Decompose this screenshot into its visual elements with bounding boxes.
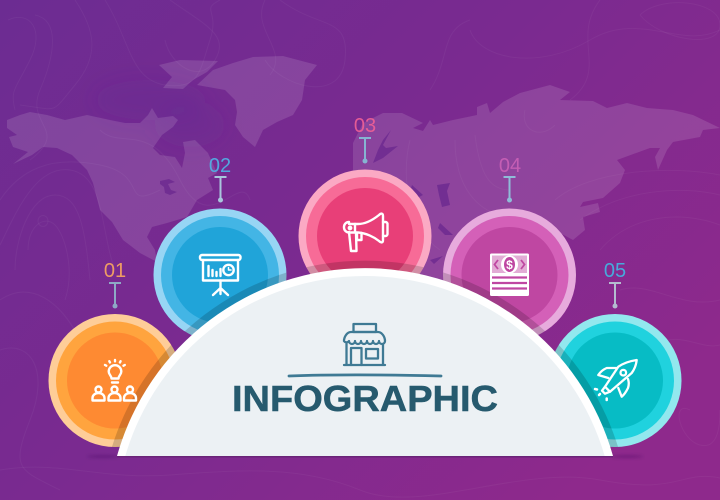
number 04: 04 [499, 155, 521, 177]
world map [7, 56, 720, 300]
icon: megaphone [344, 214, 388, 251]
dome shadow on circles [109, 261, 621, 456]
item 05 [548, 260, 682, 447]
icon: banknotes: $ [506, 258, 513, 272]
pin 01 [109, 283, 121, 308]
ground shadows [87, 455, 643, 458]
pin 02 [214, 177, 226, 202]
dome bottom edge [117, 456, 613, 458]
dome inner fill [125, 276, 605, 456]
item 01 [48, 260, 182, 447]
circle 01 [48, 314, 182, 447]
dome white border [117, 268, 613, 456]
map: landmasses [7, 56, 720, 300]
item 02 [154, 155, 286, 342]
icon: store [344, 324, 385, 365]
circle 04 [443, 208, 576, 342]
title: INFOGRAPHIC [232, 378, 498, 419]
title underline [289, 375, 441, 376]
icon: banknotes [490, 254, 529, 296]
central dome panel [117, 268, 613, 458]
number 01: 01 [104, 260, 126, 282]
icon: rocket [595, 360, 637, 400]
circle 03 [298, 170, 432, 302]
icon: lightbulb and team [92, 360, 136, 400]
map: seas and lakes [160, 130, 453, 264]
pin 05 [609, 283, 621, 308]
circle 02 [154, 208, 286, 342]
dark haze behind the map [95, 80, 225, 147]
number 02: 02 [209, 155, 231, 177]
item 03 [298, 115, 432, 302]
item 04 [443, 155, 576, 342]
circle 05 [548, 314, 682, 447]
number 05: 05 [604, 260, 626, 282]
pin 03 [359, 138, 371, 164]
icon: presentation board [200, 255, 240, 295]
pin 04 [504, 177, 516, 202]
number 03: 03 [354, 115, 376, 137]
